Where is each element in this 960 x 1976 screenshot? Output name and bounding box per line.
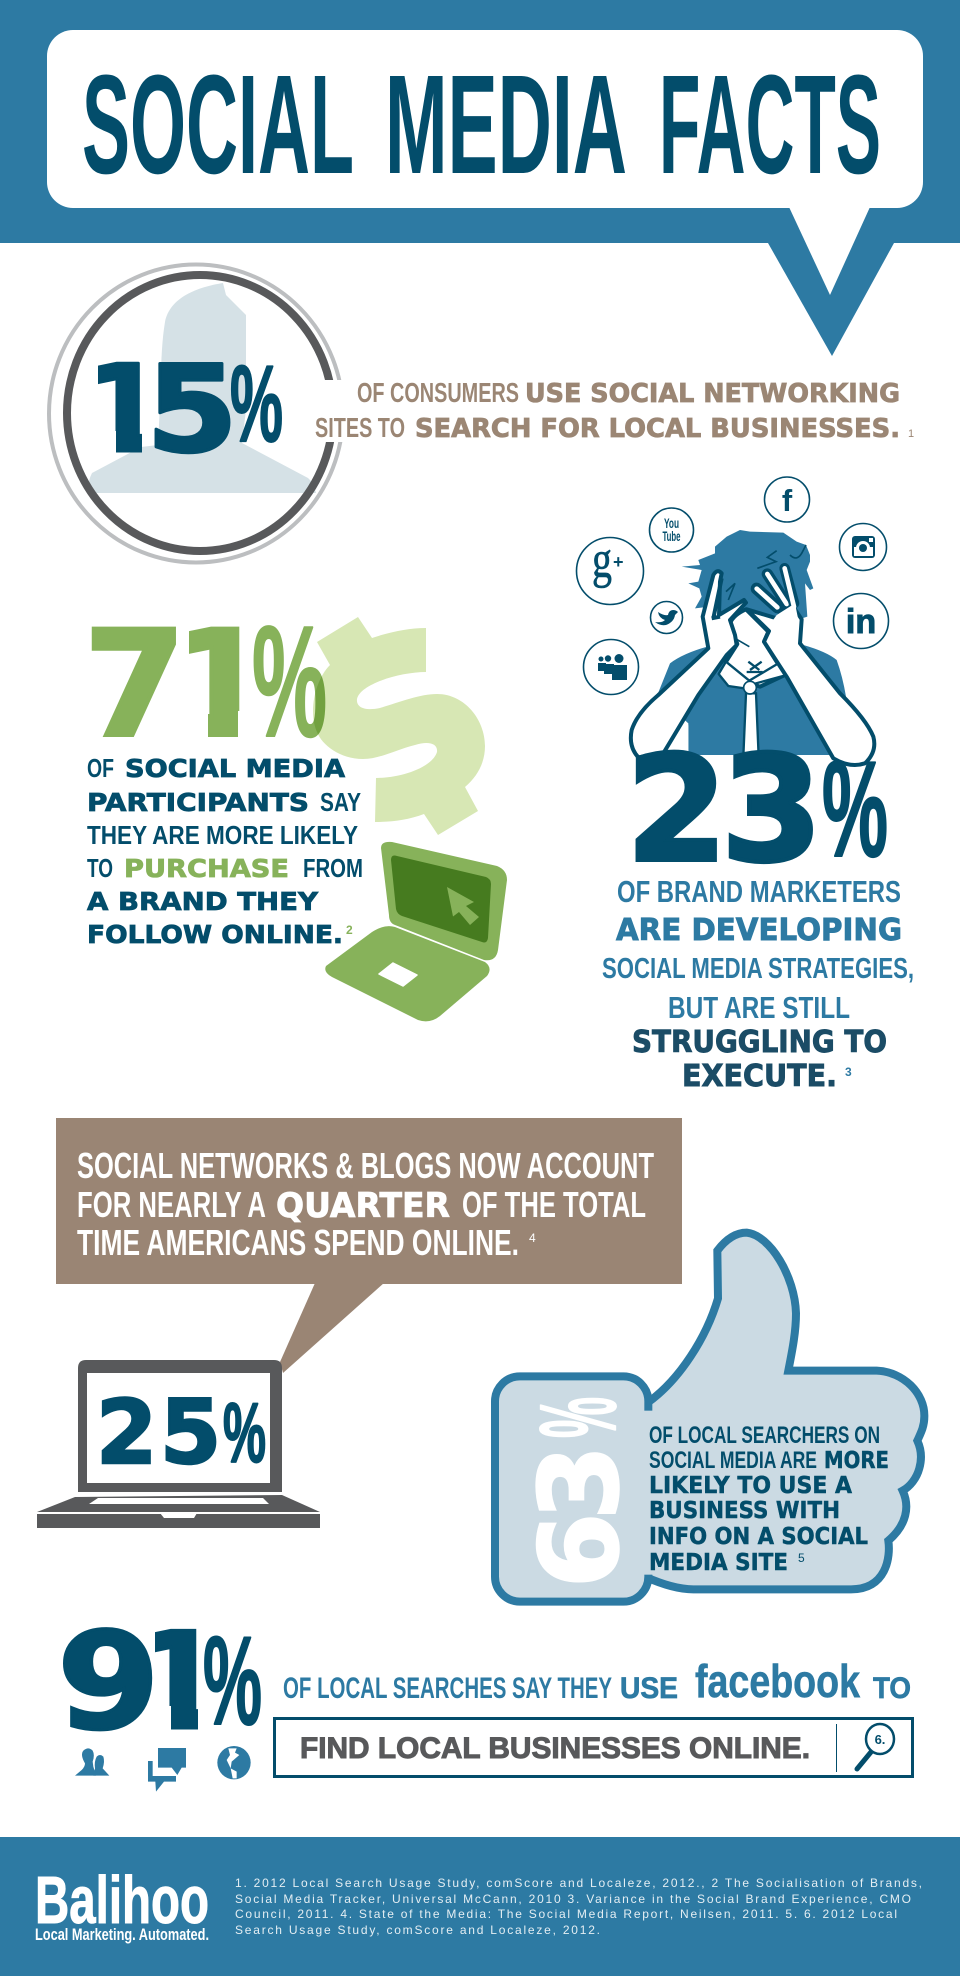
white gap under left arm	[660, 725, 688, 757]
tie	[743, 693, 759, 757]
stat: 23: 3	[721, 725, 823, 895]
caption: MEDIA SITE	[649, 1550, 788, 1576]
icon: profile silhouette	[88, 283, 316, 493]
stat: 25	[96, 1381, 221, 1484]
icon: magnifier	[857, 1724, 894, 1769]
stat: percent sign: %	[822, 733, 888, 885]
caption line two: SITES TO	[315, 412, 405, 443]
stat: 91: 1	[133, 1604, 226, 1760]
speech text: SOCIAL NETWORKS & BLOGS NOW ACCOUNT	[77, 1145, 654, 1186]
speech text: OF THE TOTAL	[462, 1184, 646, 1225]
icon: youtube: Tube	[662, 528, 681, 544]
icon: youtube	[650, 508, 694, 552]
panel: 63 percent thumbs up	[495, 1233, 924, 1602]
icon: thumb	[495, 1233, 924, 1602]
caption: SOCIAL MEDIA	[125, 754, 346, 783]
caption: FOLLOW ONLINE.	[87, 920, 343, 949]
caption line one	[357, 377, 900, 409]
stat: 71	[92, 626, 240, 737]
speech text: FOR NEARLY A	[77, 1184, 266, 1225]
icon: magnifier: 6.	[875, 1732, 885, 1747]
stat: percent sign: %	[230, 343, 283, 465]
caption line one: USE SOCIAL NETWORKING	[525, 379, 900, 409]
title: SOCIAL	[82, 45, 354, 203]
header band with speech bubble	[0, 0, 960, 356]
caption line	[283, 1655, 911, 1707]
caption	[87, 753, 363, 949]
mouth	[747, 662, 763, 672]
palm fill	[768, 603, 798, 637]
caption	[649, 1422, 889, 1576]
caption: THEY ARE MORE LIKELY	[87, 820, 358, 850]
caption: STRUGGLING TO	[632, 1025, 887, 1060]
eyes	[737, 639, 768, 647]
caption line: USE	[620, 1672, 678, 1705]
references: 1. 2012 Local Search Usage Study, comScore and Localeze, 2012., 2 The Socialisation of Brands,	[235, 1876, 922, 1890]
left arm and hand	[631, 571, 746, 757]
panel: 15 percent of consumers	[49, 264, 914, 562]
stat: percent sign: %	[223, 1386, 266, 1480]
caption: ARE DEVELOPING	[616, 913, 902, 948]
stat: 63 rotated	[518, 1445, 643, 1588]
stat: 23	[626, 725, 823, 895]
caption: MORE	[824, 1448, 889, 1474]
panel: 23 percent brand marketers	[576, 477, 914, 1094]
caption: LIKELY TO USE A	[649, 1473, 852, 1499]
caption line one: OF CONSUMERS	[357, 377, 519, 408]
stat: 63 rotated: 3	[518, 1445, 643, 1520]
face	[726, 609, 785, 687]
stat: 23: 2	[626, 725, 728, 895]
stat: 25: 5	[160, 1381, 221, 1484]
ring inner	[67, 275, 333, 551]
icon: linkedin	[834, 594, 888, 648]
icon: youtube: You	[664, 515, 679, 531]
right hand fingers	[757, 568, 794, 607]
icon: g plus	[576, 532, 644, 604]
panel: 25 percent time online	[37, 1118, 682, 1528]
bordered box	[274, 1718, 912, 1776]
title	[82, 45, 881, 203]
stat: 71: 7	[84, 600, 186, 770]
icon: g plus: g	[592, 532, 612, 589]
caption: 3	[845, 1065, 852, 1079]
caption line: facebook	[695, 1655, 860, 1707]
caption	[602, 874, 914, 1094]
caption: OF	[87, 753, 114, 783]
icon: people	[75, 1748, 109, 1776]
logo	[35, 1863, 209, 1944]
panel: 91 percent facebook	[63, 1627, 914, 1792]
speech text	[77, 1145, 654, 1263]
caption line: TO	[873, 1672, 911, 1705]
caption: 5	[798, 1551, 805, 1565]
caption: PURCHASE	[124, 854, 289, 883]
references	[235, 1876, 922, 1937]
icon: linkedin: in	[846, 603, 876, 641]
stat: 63 rotated: 6	[518, 1513, 643, 1588]
caption: A BRAND THEY	[87, 887, 319, 916]
speech box	[56, 1118, 682, 1373]
references: Search Usage Study, comScore and Localeze, 2012.	[235, 1923, 600, 1937]
caption: INFO ON A SOCIAL	[649, 1524, 868, 1550]
left hand finger gaps	[712, 578, 722, 618]
jacket	[657, 645, 846, 755]
panel: 71 percent purchase	[84, 594, 507, 1021]
stat: 15	[98, 362, 230, 454]
ring outer	[49, 264, 343, 562]
speech text: QUARTER	[276, 1186, 450, 1226]
caption: SOCIAL MEDIA ARE	[649, 1447, 817, 1474]
caption: TO	[87, 853, 113, 883]
caption line: OF LOCAL SEARCHES SAY THEY	[283, 1672, 612, 1705]
panel: 63 percent thumbs up: %	[517, 1397, 638, 1438]
logo: Local Marketing. Automated.	[35, 1925, 209, 1944]
footer	[0, 1837, 960, 1976]
icon: facebook	[764, 477, 810, 522]
references: Social Media Tracker, Universal McCann, 2010 3. Variance in the Social Brand Experience, CMO	[235, 1892, 911, 1906]
caption: BUT ARE STILL	[668, 990, 850, 1025]
ring gap for text	[312, 380, 352, 442]
icon: g plus: +	[613, 552, 624, 572]
icon: grey laptop	[37, 1360, 320, 1528]
icon: dollar sign	[313, 617, 485, 835]
stat: percent sign: %	[203, 1612, 262, 1751]
title: MEDIA	[385, 45, 627, 203]
stat: 25: 2	[96, 1381, 157, 1484]
logo: Balihoo	[35, 1863, 209, 1938]
chin line	[726, 662, 778, 681]
stat: 15: 1	[83, 341, 166, 480]
icon: green laptop	[325, 842, 507, 1021]
icon: twitter	[650, 602, 682, 634]
stat: 71: 1	[170, 600, 272, 770]
caption: SAY	[320, 787, 361, 817]
stat: percent sign: %	[252, 594, 327, 770]
icon: facebook: f	[782, 483, 793, 518]
caption: PARTICIPANTS	[87, 788, 309, 817]
references: Council, 2011. 4. State of the Media: The Social Media Report, Neilsen, 2011. 5. 6. 2012 Local	[235, 1907, 897, 1921]
stat: 91: 9	[57, 1604, 160, 1760]
speech text: 4	[529, 1231, 536, 1245]
caption: BUSINESS WITH	[649, 1498, 840, 1524]
stat: 91	[63, 1627, 198, 1732]
caption line two: 1	[908, 428, 914, 440]
icon: myspace	[584, 640, 638, 694]
icon: stressed man	[631, 530, 874, 765]
right arm and hand	[747, 602, 874, 765]
stat: 15: 5	[146, 341, 238, 480]
icon: speech bubbles	[148, 1748, 186, 1792]
caption: FROM	[303, 853, 363, 883]
caption line two: SEARCH FOR LOCAL BUSINESSES.	[415, 414, 900, 444]
hair strands	[726, 545, 806, 600]
collar	[719, 662, 787, 688]
caption: EXECUTE.	[682, 1059, 837, 1094]
speech text: TIME AMERICANS SPEND ONLINE.	[77, 1222, 519, 1263]
icon: globe	[217, 1746, 251, 1779]
hair	[682, 530, 813, 630]
caption: 2	[346, 923, 353, 937]
icon: instagram	[840, 524, 886, 570]
bordered box: FIND LOCAL BUSINESSES ONLINE.	[300, 1732, 810, 1765]
